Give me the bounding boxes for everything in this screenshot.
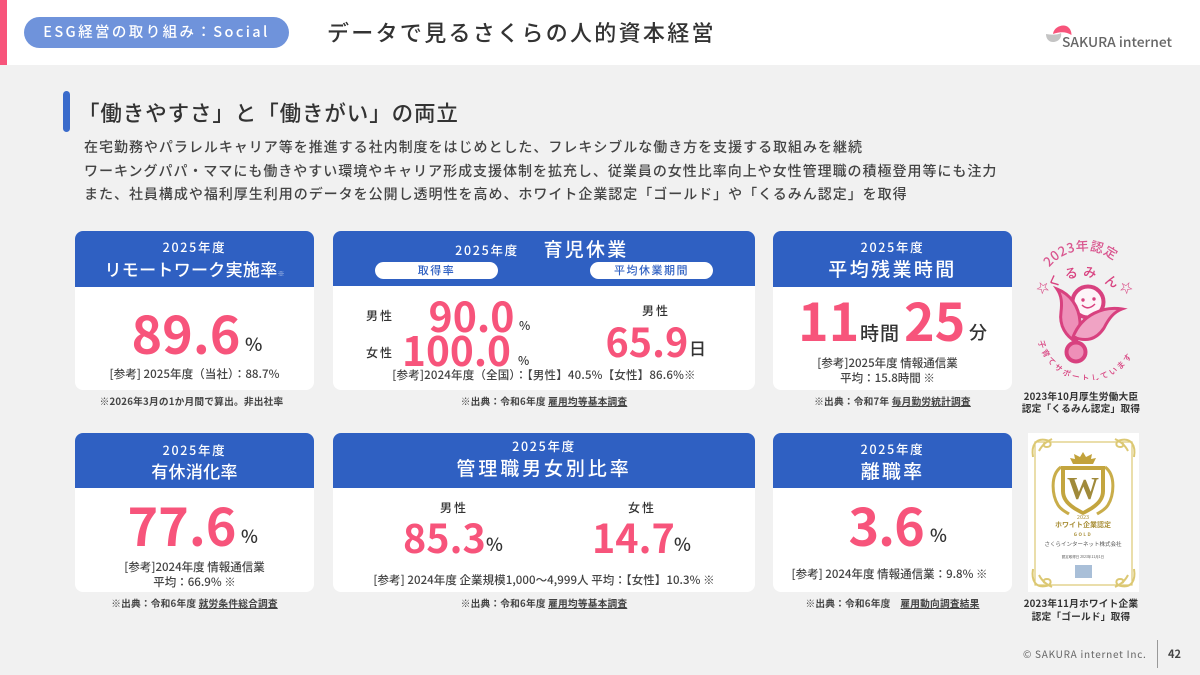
unit: % xyxy=(518,352,529,369)
pill: rate xyxy=(375,262,498,279)
header xyxy=(333,433,755,488)
certificate caption: 2023年11月ホワイト企業 xyxy=(1024,596,1138,610)
value female: 14.7 xyxy=(592,508,675,564)
unit minutes: 分 xyxy=(969,319,987,345)
seed xyxy=(1066,342,1086,362)
header: 管理職男女別比率 xyxy=(456,454,632,481)
logo xyxy=(1046,26,1173,51)
copyright: © SAKURA internet Inc. xyxy=(1023,646,1147,661)
page number: 42 xyxy=(1168,646,1181,662)
header xyxy=(333,231,755,286)
certificate caption: 認定「ゴールド」取得 xyxy=(1032,609,1130,623)
label female: 女性 xyxy=(366,344,394,361)
unit: % xyxy=(930,522,947,548)
white company certificate: 認定取得日 2023年11月1日 xyxy=(1062,554,1104,560)
header: 2025年度 xyxy=(512,436,576,455)
minutes: 25 xyxy=(904,280,965,356)
pill: duration: 平均休業期間 xyxy=(614,262,689,278)
unit days: 日 xyxy=(689,335,706,360)
reference xyxy=(124,559,265,590)
header xyxy=(75,231,314,287)
shield ornament xyxy=(1053,467,1069,514)
white company certificate xyxy=(1028,433,1139,592)
note: ※出典：令和6年度 就労条件総合調査 xyxy=(111,596,278,610)
category pill xyxy=(24,17,289,48)
card: paid leave xyxy=(75,433,314,592)
label male: 男性 xyxy=(440,499,468,516)
unit: % xyxy=(241,523,258,549)
left leaf xyxy=(1057,289,1080,342)
header: 2025年度 xyxy=(861,438,924,458)
intro text xyxy=(84,137,997,204)
intro text: また、社員構成や福利厚生利用のデータを公開し透明性を高め、ホワイト企業認定「ゴールド」や「くるみん認定」を取得 xyxy=(84,184,908,204)
kurumin name: く xyxy=(1044,269,1064,292)
kurumin caption: 2023年10月厚生労働大臣 xyxy=(1024,389,1138,403)
white company certificate: ホワイト企業認定 xyxy=(1055,520,1111,530)
kurumin name: ☆ xyxy=(1032,275,1053,298)
card: overtime xyxy=(773,231,1012,390)
reference: [参考]2024年度（全国）：【男性】40.5%【女性】86.6%※ xyxy=(392,367,696,383)
kurumin name xyxy=(1032,261,1137,298)
kurumin caption: 認定「くるみん認定」取得 xyxy=(1022,401,1140,415)
kurumin caption xyxy=(1022,389,1140,415)
kurumin mark xyxy=(1032,240,1137,380)
label male: 男性 xyxy=(642,302,670,319)
reference: 平均：15.8時間 ※ xyxy=(840,370,935,386)
unit: % xyxy=(674,531,691,557)
header xyxy=(773,231,1012,287)
note: ※2026年3月の1か月間で算出。非出社率 xyxy=(100,394,283,408)
section bar xyxy=(63,91,70,132)
value: 89.6 xyxy=(132,294,240,368)
unit: % xyxy=(486,531,503,557)
stem xyxy=(1074,336,1076,344)
value male: 85.3 xyxy=(403,508,486,564)
label male: 男性 xyxy=(366,307,394,324)
baby face xyxy=(1072,286,1104,318)
header: 2025年度 xyxy=(455,240,519,258)
pill: rate: 取得率 xyxy=(418,262,455,278)
header: リモートワーク実施率※ xyxy=(104,256,284,281)
reference: [参考] 2024年度 企業規模1,000～4,999人 平均：【女性】10.3% ※ xyxy=(373,572,715,588)
label female: 女性 xyxy=(628,499,656,516)
certificate caption xyxy=(1024,596,1138,623)
note: ※出典：令和6年度 雇用動向調査結果 xyxy=(805,596,980,610)
reference: [参考]2025年度 情報通信業 xyxy=(817,355,958,371)
value: 77.6 xyxy=(128,486,236,560)
header: 有休消化率 xyxy=(151,458,238,483)
footer divider xyxy=(1157,640,1158,668)
note: ※出典：令和6年度 雇用均等基本調査 xyxy=(461,596,627,610)
gold frame xyxy=(1033,439,1134,587)
crown xyxy=(1070,452,1096,464)
note: ※出典：令和6年度 雇用均等基本調査 xyxy=(461,394,627,408)
unit: % xyxy=(519,317,530,334)
kurumin name: み xyxy=(1082,261,1098,282)
header: 平均残業時間 xyxy=(828,255,957,282)
certificate text: 2023 xyxy=(1077,513,1089,521)
card: managers xyxy=(333,433,755,592)
W letter: W xyxy=(1067,470,1099,506)
reference: [参考] 2024年度 情報通信業：9.8% ※ xyxy=(791,566,988,582)
header: 離職率 xyxy=(861,457,924,484)
card: turnover xyxy=(773,433,1012,592)
value leave days: 65.9 xyxy=(606,312,688,368)
header xyxy=(75,433,314,488)
reference: 平均：66.9% ※ xyxy=(153,574,236,590)
category pill: ESG経営の取り組み：Social xyxy=(43,21,270,42)
white company certificate: GOLD xyxy=(1074,532,1092,538)
header: 2025年度 xyxy=(861,236,924,256)
pill: duration xyxy=(590,262,713,279)
unit hours: 時間 xyxy=(860,319,900,346)
top header bar xyxy=(0,0,1200,65)
reference xyxy=(817,355,958,386)
kurumin name: ん xyxy=(1102,269,1122,292)
note: ※出典：令和7年 毎月勤労統計調査 xyxy=(814,394,971,408)
logo: SAKURA internet xyxy=(1062,31,1173,51)
reference: [参考] 2025年度（当社）：88.7% xyxy=(109,366,280,382)
value male: 90.0 xyxy=(428,284,514,344)
unit: % xyxy=(245,331,262,357)
intro text: 在宅勤務やパラレルキャリア等を推進する社内制度をはじめとした、フレキシブルな働き方を支援する取組みを継続 xyxy=(84,137,863,157)
white company certificate: さくらインターネット株式会社 xyxy=(1044,540,1122,548)
card: remote work xyxy=(75,231,314,390)
value female: 100.0 xyxy=(402,319,511,378)
kurumin name: ☆ xyxy=(1116,275,1137,298)
certification logo xyxy=(1075,565,1092,578)
header xyxy=(773,433,1012,488)
pink accent xyxy=(0,0,7,65)
header: 育児休業 xyxy=(544,235,628,262)
card: childcare leave xyxy=(333,231,755,390)
section heading: 「働きやすさ」と「働きがい」の両立 xyxy=(78,97,459,128)
shield xyxy=(1061,466,1105,515)
right leaf xyxy=(1073,308,1122,340)
intro text: ワーキングパパ・ママにも働きやすい環境やキャリア形成支援体制を拡充し、従業員の女性比率向上や女性管理職の積極登用等にも注力 xyxy=(84,160,997,180)
header: 2025年度 xyxy=(163,236,226,256)
kurumin name: る xyxy=(1063,262,1079,283)
reference: [参考]2024年度 情報通信業 xyxy=(124,559,265,575)
header: 2025年度 xyxy=(163,440,226,458)
hours: 11 xyxy=(798,280,859,356)
title: データで見るさくらの人的資本経営 xyxy=(327,16,716,48)
value: 3.6 xyxy=(848,486,924,560)
